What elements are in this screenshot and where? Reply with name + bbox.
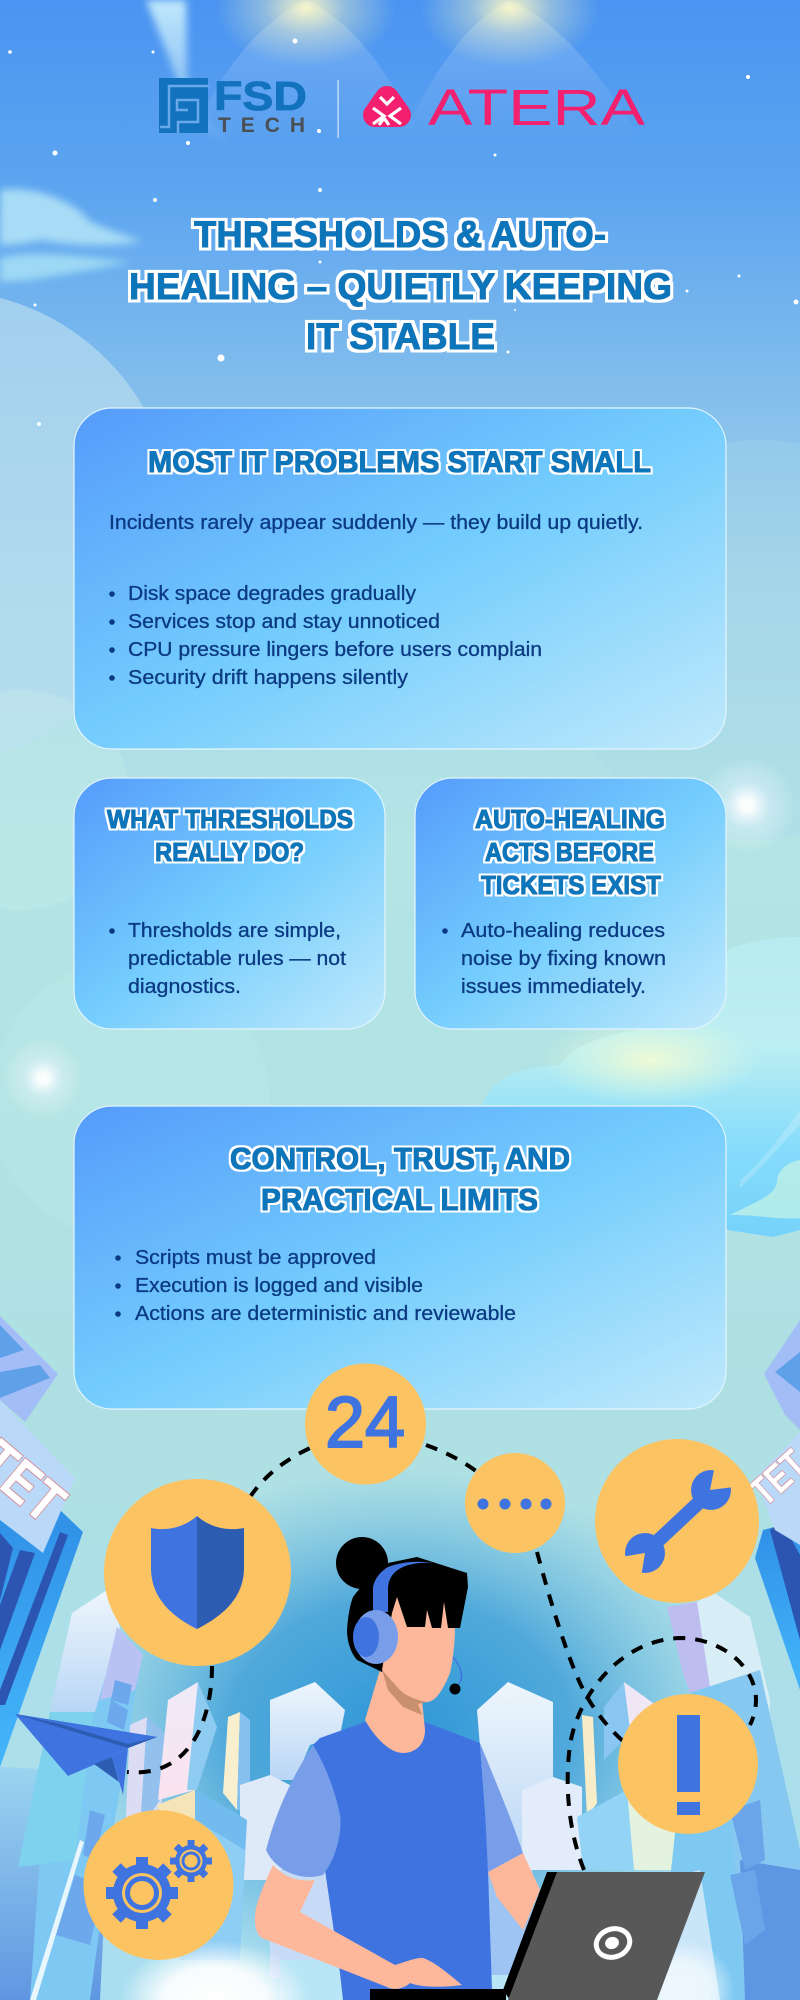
heading: TICKETS EXIST bbox=[481, 870, 661, 900]
Atera icon bbox=[373, 97, 401, 125]
panel: auto-healing acts before tickets exist bbox=[415, 778, 726, 1029]
mic bbox=[453, 1657, 462, 1686]
panel: most IT problems start small bbox=[74, 408, 726, 749]
ear cup bbox=[354, 1610, 398, 1664]
bullet text: diagnostics. bbox=[128, 976, 241, 998]
panel: what thresholds really do bbox=[74, 778, 385, 1029]
heading: CONTROL, TRUST, AND bbox=[230, 1141, 570, 1176]
icon: 24 hours badge bbox=[305, 1364, 426, 1484]
shirt bbox=[313, 1722, 493, 2000]
bullet list: Execution is logged and visible bbox=[135, 1275, 423, 1297]
left sleeve bbox=[266, 1745, 340, 1877]
hair back bbox=[347, 1557, 468, 1672]
panel: control, trust, and practical limits bbox=[74, 1106, 726, 1409]
icon: exclamation badge bbox=[618, 1694, 758, 1834]
logo divider bbox=[338, 80, 339, 138]
left arm and hand bbox=[255, 1865, 462, 1989]
TECH wordmark: TECH bbox=[218, 114, 305, 137]
bullet text bbox=[442, 920, 666, 998]
icon: 24 hours badge: 24 bbox=[325, 1383, 405, 1463]
dashed connector lines bbox=[127, 1445, 756, 1870]
heading bbox=[230, 1141, 570, 1217]
icon: dots badge bbox=[465, 1453, 565, 1553]
title: HEALING – QUIETLY KEEPING bbox=[129, 266, 672, 307]
bullet text: Auto-healing reduces bbox=[461, 920, 665, 942]
big gear bbox=[106, 1857, 178, 1929]
person with headset bbox=[255, 1537, 540, 2000]
icon: gears badge bbox=[84, 1810, 234, 1960]
bullet text: predictable rules — not bbox=[128, 948, 346, 970]
heading bbox=[107, 804, 353, 867]
bullet list bbox=[115, 1247, 516, 1325]
icon: wrench badge bbox=[595, 1439, 759, 1603]
bullet list: Security drift happens silently bbox=[128, 667, 408, 689]
face bbox=[382, 1597, 455, 1702]
hair bun bbox=[336, 1537, 388, 1589]
logo: FSD Tech bbox=[159, 73, 307, 137]
bullet text: Thresholds are simple, bbox=[128, 920, 341, 942]
right arm bbox=[488, 1853, 540, 1930]
bullet text bbox=[109, 920, 346, 998]
sun glows at the top bbox=[190, 0, 640, 140]
bullet list: Scripts must be approved bbox=[135, 1247, 376, 1269]
heading bbox=[475, 804, 665, 900]
small gear bbox=[170, 1840, 212, 1882]
Atera wordmark: ATERA bbox=[428, 79, 645, 136]
bullet list: CPU pressure lingers before users complain bbox=[128, 639, 542, 661]
cloud bank on the right bbox=[480, 937, 800, 1237]
logo: Atera bbox=[373, 79, 645, 136]
bullet list: Actions are deterministic and reviewable bbox=[135, 1303, 516, 1325]
bullet list: Disk space degrades gradually bbox=[128, 583, 416, 605]
right sleeve bbox=[480, 1743, 523, 1872]
title: IT STABLE bbox=[306, 316, 495, 357]
FSD wordmark: FSD bbox=[214, 73, 307, 119]
intro sentence: Incidents rarely appear suddenly — they build up quietly. bbox=[109, 512, 643, 534]
heading: ACTS BEFORE bbox=[485, 837, 654, 867]
heading: PRACTICAL LIMITS bbox=[261, 1182, 538, 1217]
title bbox=[129, 214, 672, 357]
bullet list bbox=[109, 583, 542, 689]
heading: MOST IT PROBLEMS START SMALL bbox=[148, 446, 651, 479]
headset band bbox=[373, 1562, 433, 1612]
heading: AUTO-HEALING bbox=[475, 804, 665, 834]
bullet text: noise by fixing known bbox=[461, 948, 666, 970]
heading: WHAT THRESHOLDS bbox=[107, 804, 353, 834]
right tower and sign bbox=[742, 1320, 800, 1690]
heading: REALLY DO? bbox=[155, 837, 304, 867]
title: THRESHOLDS & AUTO- bbox=[194, 214, 606, 255]
city buildings center bbox=[0, 1590, 800, 2000]
bullet text: issues immediately. bbox=[461, 976, 646, 998]
icon: paper plane bbox=[15, 1714, 157, 1795]
wispy cloud left bbox=[0, 189, 143, 282]
left tower and sign bbox=[0, 1316, 83, 1767]
light beam streak bbox=[146, 0, 236, 150]
bullet list: Services stop and stay unnoticed bbox=[128, 611, 440, 633]
FSD mark bbox=[159, 78, 209, 133]
neck shadow bbox=[382, 1670, 427, 1715]
sparkles bbox=[3, 757, 795, 1118]
laptop bbox=[370, 1872, 705, 2000]
neck bbox=[365, 1670, 425, 1753]
star dots bbox=[8, 38, 798, 426]
icon: shield badge bbox=[104, 1479, 291, 1666]
